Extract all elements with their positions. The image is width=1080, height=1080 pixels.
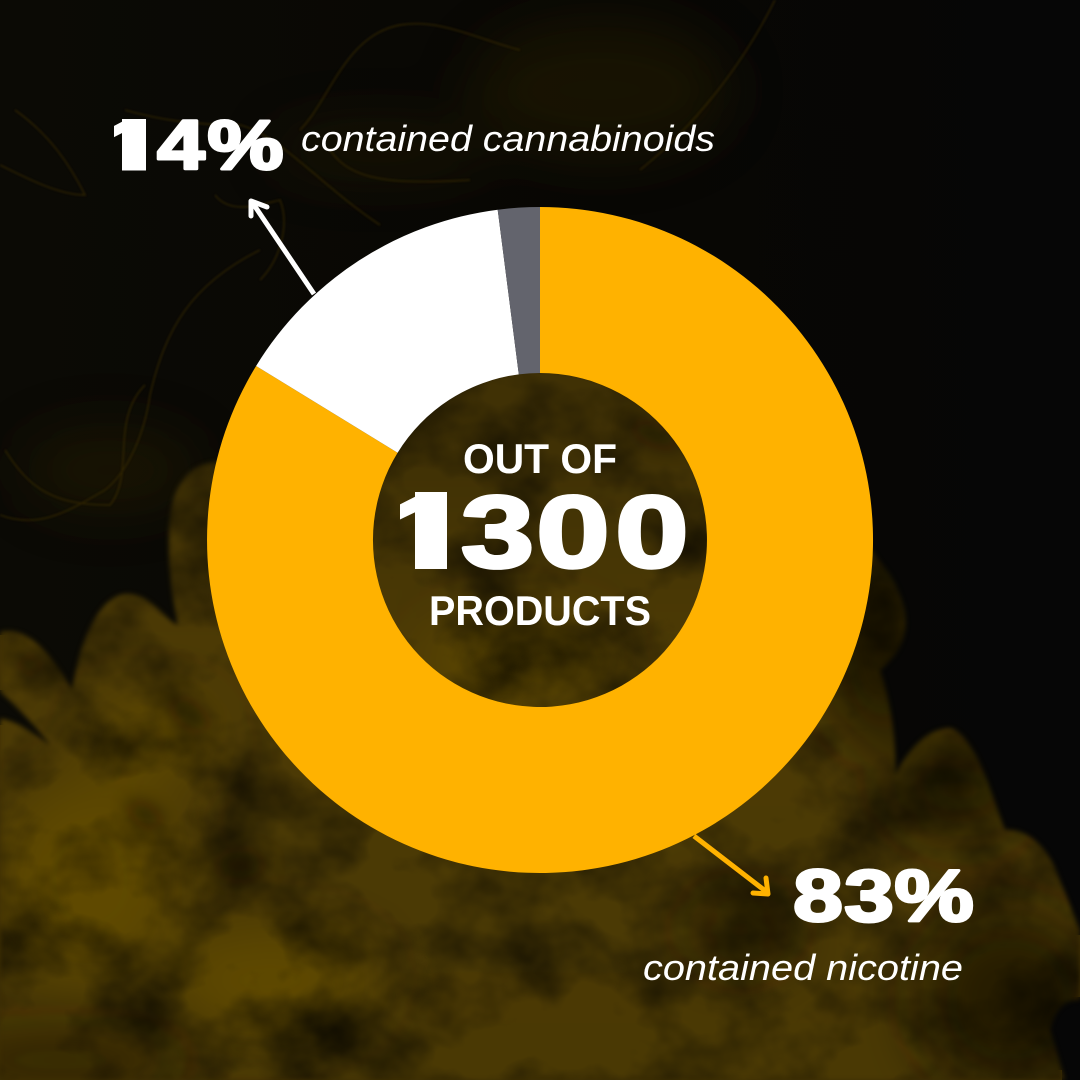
faint upper haze — [20, 20, 730, 510]
arrow: white to 14% — [251, 201, 314, 294]
arrow: yellow to 83% — [694, 836, 768, 894]
14% value — [114, 119, 283, 171]
segment: 14% cannabinoids — [256, 210, 519, 453]
products: PRODUCTS — [429, 587, 651, 634]
1300: 1300 — [387, 474, 689, 589]
segment: 83% nicotine — [207, 207, 873, 873]
callout: 14% contained cannabinoids — [106, 105, 715, 184]
smoke edge underlay — [0, 635, 1080, 1080]
segment: remainder — [498, 207, 540, 374]
nicotine label: contained nicotine — [643, 947, 963, 988]
1300 — [400, 492, 686, 570]
callout: 83% contained nicotine — [643, 856, 974, 988]
cannabinoids label: contained cannabinoids — [301, 118, 715, 159]
14% value: 14% — [106, 105, 283, 184]
donut chart — [207, 207, 873, 873]
out of: OUT OF — [463, 435, 617, 482]
83% value: 83% — [793, 856, 974, 937]
smoke cloud — [0, 370, 1080, 1080]
centre label — [400, 444, 686, 626]
smoke wisps — [0, 0, 775, 520]
